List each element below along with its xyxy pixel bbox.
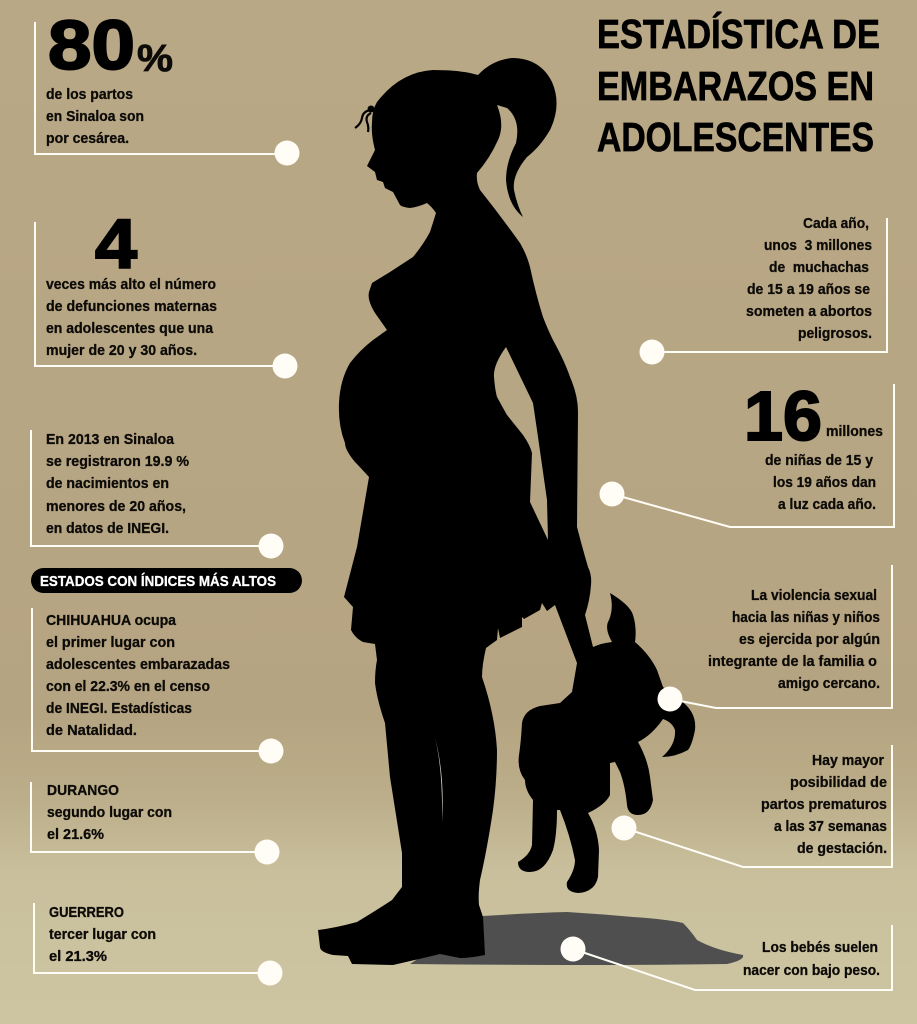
panel: sexual violence bbox=[658, 565, 892, 712]
panel: premature births: posibilidad de bbox=[790, 774, 887, 791]
panel: Chihuahua: con el 22.3% en el censo bbox=[46, 678, 210, 695]
panel: 4 times maternal deaths: mujer de 20 y 30 años. bbox=[46, 342, 197, 359]
panel: Guerrero: el 21.3% bbox=[49, 948, 107, 965]
panel: Sinaloa 2013: se registraron 19.9 % bbox=[46, 453, 189, 470]
panel: unsafe abortions: unos 3 millones bbox=[764, 237, 872, 254]
panel: 80% cesarean: % bbox=[137, 38, 173, 80]
panel: low birth weight: nacer con bajo peso. bbox=[743, 962, 880, 979]
panel: 16 million births: de niñas de 15 y bbox=[765, 452, 874, 469]
panel: sexual violence: integrante de la familia o bbox=[708, 653, 877, 670]
panel: 4 times maternal deaths: veces más alto el número bbox=[46, 276, 216, 293]
panel: 4 times maternal deaths: de defunciones maternas bbox=[46, 298, 217, 315]
panel: Chihuahua: CHIHUAHUA ocupa bbox=[46, 612, 177, 629]
title bbox=[597, 11, 880, 160]
panel: 4 times maternal deaths: en adolescentes que una bbox=[46, 320, 214, 337]
panel: premature births bbox=[612, 745, 892, 867]
panel: Sinaloa 2013 bbox=[31, 430, 284, 558]
panel: unsafe abortions: Cada año, bbox=[803, 215, 869, 232]
panel: Sinaloa 2013: En 2013 en Sinaloa bbox=[46, 431, 175, 448]
panel: 16 million births bbox=[600, 377, 894, 527]
panel: sexual violence: es ejercida por algún bbox=[739, 631, 880, 648]
panel: Durango bbox=[31, 782, 280, 864]
panel: premature births: Hay mayor bbox=[812, 752, 884, 769]
panel: Chihuahua: el primer lugar con bbox=[46, 634, 175, 651]
panel: Sinaloa 2013: de nacimientos en bbox=[46, 475, 169, 492]
panel: premature births: de gestación. bbox=[797, 840, 887, 857]
panel: premature births: partos prematuros bbox=[761, 796, 887, 813]
panel: sexual violence: hacia las niñas y niños bbox=[732, 609, 880, 626]
panel: Durango: el 21.6% bbox=[47, 826, 104, 843]
panel: 80% cesarean: de los partos bbox=[46, 86, 133, 103]
panel: 4 times maternal deaths bbox=[35, 205, 298, 378]
panel: Durango: DURANGO bbox=[47, 782, 119, 799]
panel: 16 million births: a luz cada año. bbox=[778, 496, 876, 513]
panel: Guerrero: tercer lugar con bbox=[49, 926, 156, 943]
panel: sexual violence: La violencia sexual bbox=[751, 587, 877, 604]
panel: low birth weight bbox=[560, 925, 892, 990]
panel: Chihuahua: adolescentes embarazadas bbox=[46, 656, 230, 673]
panel: unsafe abortions: peligrosos. bbox=[798, 325, 872, 342]
panel: 4 times maternal deaths: 4 bbox=[95, 205, 137, 283]
panel: Sinaloa 2013: en datos de INEGI. bbox=[46, 520, 169, 537]
panel: 16 million births: los 19 años dan bbox=[773, 474, 876, 491]
panel: Guerrero: GUERRERO bbox=[49, 904, 124, 921]
panel: premature births: a las 37 semanas bbox=[774, 818, 887, 835]
panel: 80% cesarean bbox=[35, 6, 300, 166]
panel: unsafe abortions: de muchachas bbox=[769, 259, 869, 276]
panel: Chihuahua: de INEGI. Estadísticas bbox=[46, 700, 192, 717]
panel: unsafe abortions bbox=[640, 215, 887, 364]
panel: 80% cesarean: 80 bbox=[48, 6, 135, 84]
floor shadow bbox=[410, 912, 743, 965]
panel: Durango: segundo lugar con bbox=[47, 804, 172, 821]
panel: unsafe abortions: de 15 a 19 años se bbox=[747, 281, 870, 298]
panel: Chihuahua bbox=[32, 608, 284, 764]
panel: Chihuahua: de Natalidad. bbox=[46, 722, 137, 739]
panel: Guerrero bbox=[34, 903, 282, 986]
panel: 16 million births: 16 bbox=[744, 377, 822, 455]
panel: Sinaloa 2013: menores de 20 años, bbox=[46, 498, 186, 515]
panel: 16 million births: millones bbox=[826, 423, 883, 440]
panel: low birth weight: Los bebés suelen bbox=[762, 939, 878, 956]
heading: states with highest rates: ESTADOS CON ÍNDICES MÁS ALTOS bbox=[40, 573, 276, 590]
panel: sexual violence: amigo cercano. bbox=[778, 675, 880, 692]
panel: 80% cesarean: en Sinaloa son bbox=[46, 108, 144, 125]
heading: states with highest rates bbox=[31, 568, 302, 593]
panel: 80% cesarean: por cesárea. bbox=[46, 130, 129, 147]
panel: unsafe abortions: someten a abortos bbox=[746, 303, 872, 320]
silhouette: pregnant adolescent with teddy bear bbox=[318, 58, 695, 965]
